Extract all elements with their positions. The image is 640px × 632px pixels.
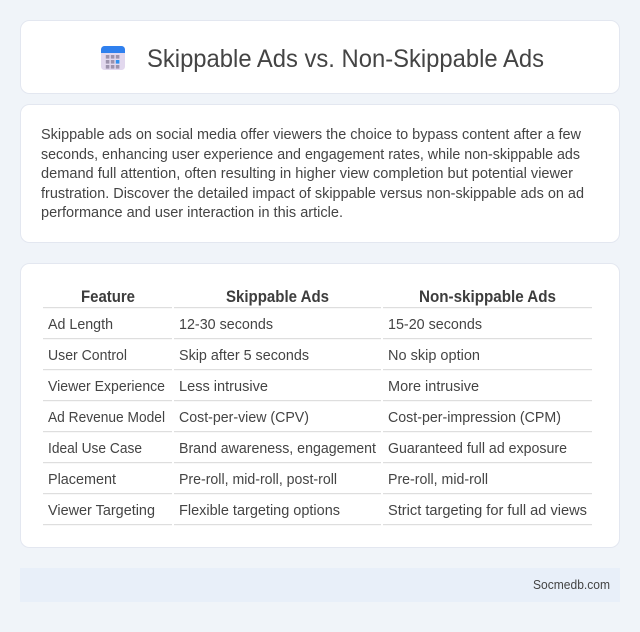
- text block: introduction: Skippable ads on social media offer viewers the choice to bypass content after a few: [41, 127, 581, 143]
- text block: introduction: performance and user interaction in this article.: [41, 205, 343, 221]
- footer source text: Socmedb.com: [533, 577, 610, 592]
- table header: [81, 288, 556, 306]
- table row: viewer targeting: Strict targeting for full ad views: [388, 503, 587, 519]
- table row: user control: Skip after 5 seconds: [179, 348, 309, 364]
- table row: user control: User Control: [48, 348, 127, 364]
- panel: intro text card: [20, 104, 620, 242]
- panel: comparison table card: [20, 264, 620, 548]
- table row: ideal use case: Guaranteed full ad exposure: [388, 441, 567, 457]
- table row: user control: [48, 348, 480, 364]
- table row: ad length: [48, 317, 482, 333]
- footer bar: [20, 568, 620, 602]
- text block: introduction: [41, 127, 584, 221]
- table row: ad revenue model: Cost-per-view (CPV): [179, 410, 309, 426]
- text block: introduction: seconds, enhancing user experience and engagement rates, while non-skippable ads: [41, 147, 580, 163]
- panel: title card: [20, 20, 620, 94]
- table row: placement: Pre-roll, mid-roll, post-roll: [179, 472, 337, 488]
- table row: ideal use case: Brand awareness, engagement: [179, 441, 376, 457]
- table row: ad revenue model: Cost-per-impression (CPM): [388, 410, 561, 426]
- text block: introduction: frustration. Discover the detailed impact of skippable versus non-skippable ads on ad: [41, 186, 584, 202]
- table row: user control: No skip option: [388, 348, 480, 364]
- table row: placement: Pre-roll, mid-roll: [388, 472, 488, 488]
- title: Skippable Ads vs. Non-Skippable Ads: [147, 46, 544, 73]
- table row: viewer targeting: Flexible targeting options: [179, 503, 340, 519]
- table row: viewer experience: [48, 379, 479, 395]
- table row: viewer targeting: Viewer Targeting: [48, 503, 155, 519]
- table row: ad revenue model: [48, 410, 561, 426]
- table row: viewer experience: Less intrusive: [179, 379, 268, 395]
- table row: ad length: 12-30 seconds: [179, 317, 273, 333]
- table row: viewer targeting: [48, 503, 587, 519]
- table row: ideal use case: Ideal Use Case: [48, 441, 142, 457]
- table header: Skippable Ads: [226, 288, 329, 306]
- table row: viewer experience: Viewer Experience: [48, 379, 165, 395]
- table row: ad revenue model: Ad Revenue Model: [48, 410, 165, 426]
- text block: introduction: demand full attention, often resulting in higher view completion but potential viewer: [41, 166, 573, 182]
- table header: Non-skippable Ads: [419, 288, 556, 306]
- table row: placement: [48, 472, 488, 488]
- icon: calendar: [101, 46, 125, 70]
- table header: Feature: [81, 288, 135, 306]
- table row: placement: Placement: [48, 472, 116, 488]
- table row: ad length: 15-20 seconds: [388, 317, 482, 333]
- table row: ad length: Ad Length: [48, 317, 113, 333]
- table row: ideal use case: [48, 441, 567, 457]
- table row: viewer experience: More intrusive: [388, 379, 479, 395]
